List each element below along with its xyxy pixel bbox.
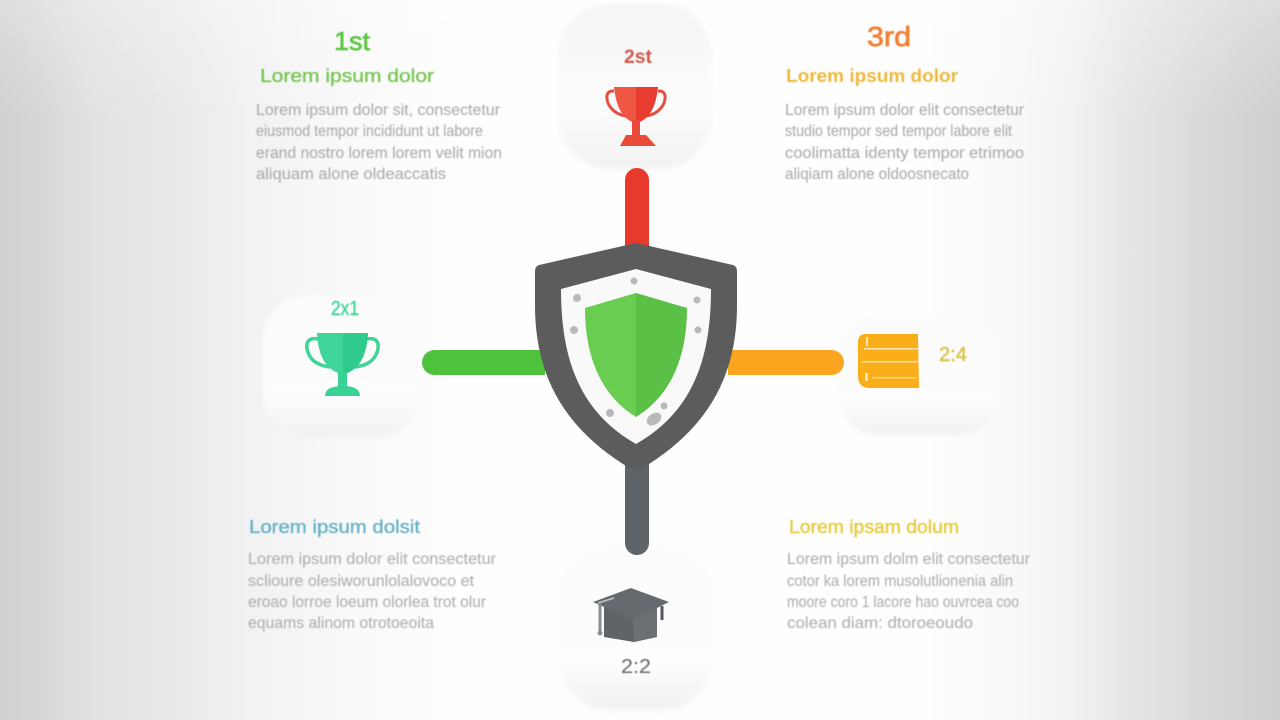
label: graduation cap: 2:2 xyxy=(621,656,651,678)
body text: erand nostro lorem lorem velit mion xyxy=(256,145,502,162)
body text: Lorem ipsum dolor elit consectetur xyxy=(785,102,1025,119)
number: 3rd: 3rd xyxy=(867,21,911,52)
body text xyxy=(787,551,1031,632)
icon: red trophy xyxy=(607,87,665,146)
body text xyxy=(256,102,502,183)
connector: orange xyxy=(728,350,844,375)
body text: Lorem ipsum dolor sit, consectetur xyxy=(256,102,501,119)
connector: grey xyxy=(625,462,649,555)
text block: bottom left xyxy=(248,517,497,632)
shield green right half xyxy=(636,293,687,417)
shield outer frame xyxy=(535,243,737,472)
body text: aliquam alone oldeaccatis xyxy=(256,166,446,183)
body text: cotor ka lorem musolutlionenia alin xyxy=(787,573,1013,590)
label: green trophy: 2x1 xyxy=(331,298,359,320)
central shield xyxy=(535,243,737,472)
body text: equams alinom otrotoeoita xyxy=(248,615,434,632)
body text: studio tempor sed tempor labore elit xyxy=(785,123,1012,140)
heading: Lorem ipsum dolor xyxy=(260,66,434,86)
body text: Lorem ipsum dolor elit consectetur xyxy=(248,551,497,568)
body text: sclioure olesiworunlolalovoco et xyxy=(248,573,475,590)
shield rivets xyxy=(570,278,702,428)
text block: bottom right xyxy=(787,517,1031,632)
card: right xyxy=(838,318,1000,435)
shield green left half xyxy=(585,293,636,417)
card: top xyxy=(558,4,712,169)
body text xyxy=(785,102,1025,183)
icon: graduation cap xyxy=(593,588,669,642)
body text: eroao lorroe loeum olorlea trot olur xyxy=(248,594,487,611)
body text: aliqiam alone oldoosnecato xyxy=(785,166,969,183)
connector: red xyxy=(625,168,649,248)
label: orange note: 2:4 xyxy=(939,344,967,366)
body text: moore coro 1 lacore hao ouvrcea coo xyxy=(787,594,1019,611)
heading: Lorem ipsam dolum xyxy=(789,517,959,537)
connector: green xyxy=(422,350,545,375)
card: bottom xyxy=(559,548,712,710)
text block: top right xyxy=(785,21,1025,183)
heading: Lorem ipsum dolsit xyxy=(249,517,420,537)
body text: coolimatta identy tempor etrimoo xyxy=(785,145,1024,162)
body text: colean diam: dtoroeoudo xyxy=(787,615,973,632)
icon: green trophy xyxy=(307,333,378,396)
text block: top left xyxy=(256,26,502,183)
heading: Lorem ipsum dolor xyxy=(786,66,958,86)
card: left xyxy=(263,296,421,437)
shield white inner xyxy=(561,269,711,444)
label: red trophy: 2st xyxy=(624,47,653,68)
number: 1st: 1st xyxy=(334,26,371,56)
body text: Lorem ipsum dolm elit consectetur xyxy=(787,551,1031,568)
body text xyxy=(248,551,497,632)
icon: orange note xyxy=(858,334,919,388)
body text: eiusmod tempor incididunt ut labore xyxy=(256,123,483,140)
